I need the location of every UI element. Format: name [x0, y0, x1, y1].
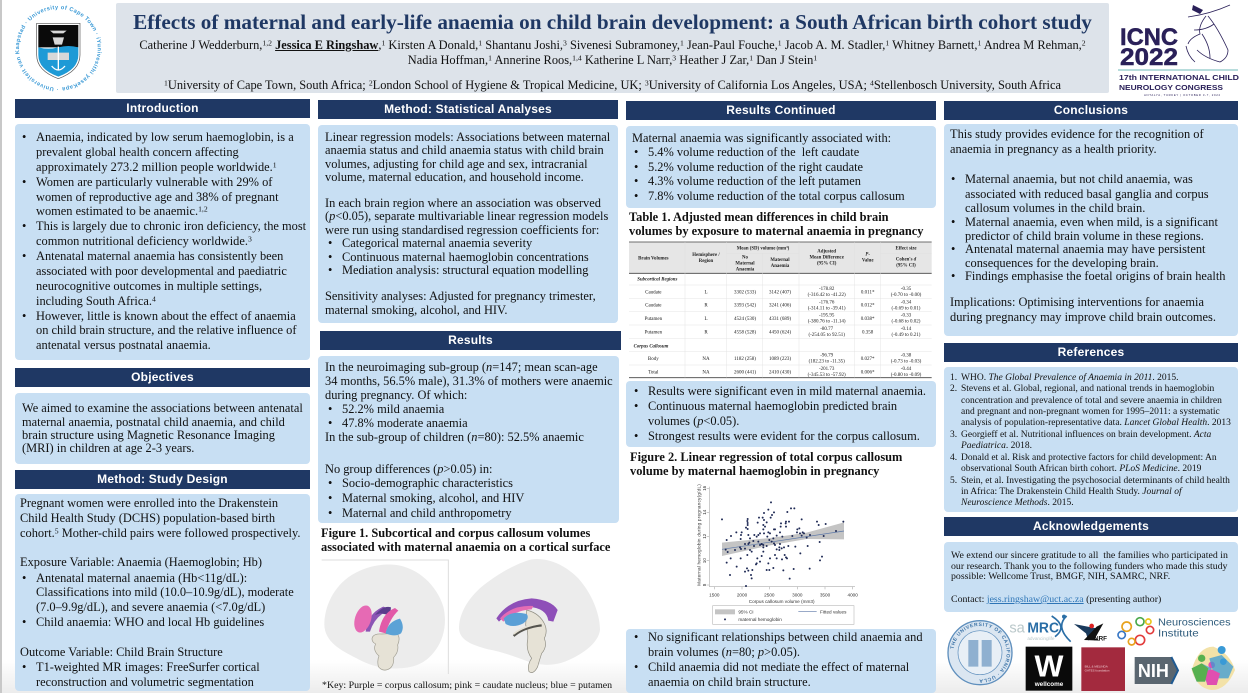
heading: Results — [320, 331, 621, 350]
panel: child anaemia bullets: brain volumes (n=80; p>0.05). — [648, 645, 800, 659]
logos: funders and institutions: GATES foundation — [1085, 669, 1110, 673]
panel: statistical analyses: volume, maternal education, and household income. — [325, 170, 584, 184]
heading: Conclusions — [944, 101, 1238, 120]
figure: brain renderings — [322, 559, 600, 674]
heading: Results: Results — [448, 333, 493, 347]
panel: references: 2. — [950, 384, 957, 394]
panel: study design: T1-weighted MR images: FreeSurfer cortical — [36, 660, 260, 674]
panel: results: • — [328, 491, 332, 505]
logos: funders and institutions: BILL & MELINDA — [1085, 664, 1108, 668]
panel: introduction: antenatal versus postnatal anaemia. — [36, 338, 211, 352]
panel: introduction: • — [22, 249, 26, 263]
panel: references: observational South African birth cohort. PLoS Medicine. 2019 — [961, 464, 1201, 474]
table: adjusted mean differences: -0.33 — [901, 314, 912, 319]
table: adjusted mean differences: -176.76 — [819, 300, 835, 305]
panel: child anaemia bullets: • — [634, 660, 638, 674]
panel: results: • — [328, 416, 332, 430]
panel: results: In the neuroimaging sub-group (n=147; mean scan-age — [325, 360, 598, 374]
panel: introduction: women of reproductive age and 38% of pregnant — [36, 190, 279, 204]
logos: funders and institutions: NRF — [1094, 636, 1107, 643]
panel: conclusions: Findings emphasise the foetal origins of brain health — [965, 269, 1226, 283]
panel: results: In the sub-group of children (n=80): 52.5% anaemic — [325, 430, 584, 444]
panel: statistical analyses: • — [328, 263, 332, 277]
panel: introduction: • — [22, 309, 26, 323]
panel: study design: Child Health Study (DCHS) population-based birth — [20, 511, 275, 525]
caption: Figure 2 — [630, 450, 902, 478]
table: adjusted mean differences: 0.011* — [861, 290, 875, 295]
panel: statistical analyses: were run using standardised regression coefficients for: — [325, 223, 599, 237]
table: adjusted mean differences: 1089 (223) — [769, 357, 791, 362]
logos: funders and institutions — [947, 614, 1235, 691]
logos: funders and institutions: wellcome — [1034, 681, 1064, 688]
panel: conclusions: Maternal anaemia, even when mild, is a significant — [965, 215, 1218, 229]
table: adjusted mean differences: 3302 (533) — [734, 290, 756, 295]
panel: conclusions: anaemia in pregnancy as a health priority. — [950, 142, 1157, 156]
panel: references: in Africa: The Drakenstein Child Health Study. Journal of — [961, 487, 1182, 497]
panel: objectives: (MRI) in children at age 2-3 years. — [22, 441, 194, 455]
chart: linear regression scatter: 2500 — [764, 593, 775, 598]
heading: Conclusions: Conclusions — [1054, 103, 1128, 117]
panel: conclusions: Antenatal maternal anaemia may have persistent — [965, 242, 1205, 256]
table: adjusted mean differences: -80.77 — [820, 327, 834, 332]
panel: results: No group differences (p>0.05) in: — [325, 462, 492, 476]
panel: statistical analyses — [318, 125, 618, 323]
panel: study design — [15, 494, 310, 691]
panel: objectives: We aimed to examine the associations between antenatal — [22, 401, 303, 415]
table: adjusted mean differences: (-314.11 to -39.41) — [808, 306, 846, 311]
table: adjusted mean differences: (-345.53 to -57.92) — [808, 373, 846, 378]
panel: results continued: • — [634, 145, 638, 159]
logo: University of Cape Town crest: · Universiteit van Kaapstad · University of Cape Town · iYunivesithi yaseKapa — [15, 6, 102, 92]
table: adjusted mean differences: 3393 (542) — [734, 304, 756, 309]
logo: ICNC 2022 — [1118, 4, 1240, 97]
logo: ICNC 2022: 17th INTERNATIONAL CHILD — [1119, 73, 1240, 82]
table: adjusted mean differences — [629, 242, 932, 378]
panel: results continued: 7.8% volume reduction of the total corpus callosum — [648, 189, 905, 203]
table: adjusted mean differences: 3142 (407) — [769, 290, 791, 295]
table: adjusted mean differences: (-0.68 to 0.02) — [892, 320, 921, 325]
panel: introduction: • — [22, 130, 26, 144]
table: adjusted mean differences: 4524 (530) — [734, 317, 756, 322]
panel: conclusions: • — [951, 242, 955, 256]
table: adjusted mean differences: 4331 (689) — [769, 317, 791, 322]
panel: study design: Child anaemia: WHO and local Hb guidelines — [36, 615, 264, 629]
panel: conclusions: • — [951, 215, 955, 229]
table: adjusted mean differences: -195.95 — [819, 314, 835, 319]
table: adjusted mean differences: R — [704, 330, 708, 335]
panel: references: Donald et al. Risk and protective factors for child development: An — [961, 453, 1217, 463]
table: adjusted mean differences: Region — [699, 259, 714, 264]
panel: statistical analyses: • — [328, 250, 332, 264]
panel: conclusions — [944, 124, 1238, 336]
panel: results continued: 5.4% volume reduction of the left caudate — [648, 145, 859, 159]
panel: statistical analyses: Continuous maternal haemoglobin concentrations — [342, 250, 589, 264]
chart: linear regression scatter: maternal hemoglobin — [738, 617, 782, 622]
panel: results: Maternal smoking, alcohol, and HIV — [342, 491, 524, 505]
panel: statistical analyses: (p<0.05), separate multivariable linear regression models — [325, 209, 608, 223]
chart: linear regression scatter: 12 — [702, 533, 707, 539]
heading: Objectives: Objectives — [131, 370, 194, 384]
panel: introduction: associated with poor developmental and paediatric — [36, 264, 287, 278]
panel: results — [318, 356, 619, 523]
chart: linear regression scatter: 2000 — [737, 593, 748, 598]
panel: results bullets: • — [634, 429, 638, 443]
panel: references — [944, 367, 1238, 512]
table: adjusted mean differences: R — [704, 304, 708, 309]
panel: conclusions: • — [951, 269, 955, 283]
panel: references: Georgieff et al. Nutritional influences on brain development. Acta — [961, 430, 1211, 440]
table: adjusted mean differences: NA — [702, 370, 710, 375]
panel: conclusions: Maternal anaemia, but not child anaemia, was — [965, 172, 1193, 186]
panel: statistical analyses: Linear regression models: Associations between maternal — [325, 130, 610, 144]
panel: references: concentration and prevalence of total and severe anaemia in children — [961, 396, 1222, 406]
heading: Method: Statistical Analyses: Method: Statistical Analyses — [384, 102, 552, 116]
panel: results: 52.2% mild anaemia — [342, 402, 444, 416]
table: adjusted mean differences: 0.358 — [862, 330, 874, 335]
table: adjusted mean differences: Total — [648, 370, 659, 375]
heading: Acknowledgements: Acknowledgements — [1033, 519, 1149, 533]
panel: acknowledgements: We extend our sincere gratitude to all the families who participated in — [951, 550, 1228, 561]
caption: Table 1: Table 1. Adjusted mean differences in child brain — [629, 210, 889, 224]
caption: Figure 1 — [321, 526, 610, 554]
table: adjusted mean differences: Hemisphere / — [692, 253, 720, 258]
panel: conclusions: associated with reduced basal ganglia and corpus — [965, 187, 1209, 201]
panel: study design: Antenatal maternal anaemia (Hb<11g/dL): — [36, 571, 247, 585]
panel: child anaemia bullets: No significant relationships between child anaemia and — [648, 630, 923, 644]
table: adjusted mean differences: Value — [862, 258, 874, 263]
panel: study design: reconstruction and volumetric segmentation — [36, 675, 254, 689]
panel: results bullets: • — [634, 384, 638, 398]
panel: results: Socio-demographic characteristics — [342, 476, 513, 490]
table: adjusted mean differences: 2410 (430) — [769, 370, 791, 375]
panel: results: during pregnancy. Of which: — [325, 388, 467, 402]
table: adjusted mean differences: -0.38 — [901, 354, 912, 359]
logo: ICNC 2022: 2022 — [1120, 44, 1178, 71]
logo: ICNC 2022: NEUROLOGY CONGRESS — [1119, 83, 1223, 92]
panel: statistical analyses: In each brain region where an association was observed — [325, 196, 601, 210]
table: adjusted mean differences: 2600 (441) — [734, 370, 756, 375]
panel: objectives — [15, 393, 310, 464]
panel: introduction: Antenatal maternal anaemia has consistently been — [36, 249, 283, 263]
heading: Introduction: Introduction — [126, 101, 199, 115]
panel: study design: • — [22, 615, 26, 629]
panel: results bullets: volumes (p<0.05). — [648, 414, 739, 428]
panel: results: • — [328, 506, 332, 520]
chart: linear regression scatter: 10 — [702, 558, 707, 563]
panel: results: 47.8% moderate anaemia — [342, 416, 468, 430]
table: adjusted mean differences: Mean (SD) volume (mm³) — [737, 245, 790, 251]
panel: statistical analyses: • — [328, 236, 332, 250]
panel: references: Stevens et al. Global, regional, and national trends in haemoglobin — [961, 384, 1214, 394]
table: adjusted mean differences: -201.73 — [819, 367, 835, 372]
panel: statistical analyses: Mediation analysis: structural equation modelling — [342, 263, 588, 277]
table: adjusted mean differences: -0.44 — [901, 367, 912, 372]
table: adjusted mean differences: (95% CI) — [896, 264, 916, 269]
panel: conclusions: consequences for the developing brain. — [965, 256, 1159, 270]
table: adjusted mean differences: (-0.49 to 0.21) — [892, 333, 921, 338]
heading: Method: Study Design: Method: Study Design — [97, 472, 228, 486]
logos: funders and institutions: Institute — [1158, 629, 1199, 640]
panel: results bullets: Continuous maternal haemoglobin predicted brain — [648, 399, 897, 413]
logos: funders and institutions: W — [1035, 650, 1064, 684]
table: adjusted mean differences: (-380.76 to -11.14) — [808, 320, 846, 325]
chart: linear regression scatter — [697, 484, 858, 625]
chart: linear regression scatter: 3500 — [820, 593, 831, 598]
table: adjusted mean differences: (-0.70 to -0.00) — [891, 293, 922, 298]
table: adjusted mean differences: -0.35 — [901, 287, 912, 292]
logos: funders and institutions: advancinglife — [1027, 636, 1055, 641]
table: adjusted mean differences: Putamen — [645, 330, 663, 335]
panel: conclusions: Implications: Optimising interventions for anaemia — [950, 295, 1204, 309]
table: adjusted mean differences: Subcortical Regions — [637, 278, 678, 283]
panel: statistical analyses: anaemia status and child anaemia status with child brain — [325, 143, 604, 157]
table: adjusted mean differences: Effect size — [895, 246, 917, 251]
panel: statistical analyses: Sensitivity analyses: Adjusted for pregnancy trimester, — [325, 289, 596, 303]
panel: results bullets: Strongest results were evident for the corpus callosum. — [648, 429, 920, 443]
table: adjusted mean differences: Body — [648, 357, 659, 362]
table: adjusted mean differences: -0.34 — [901, 300, 912, 305]
table: adjusted mean differences: L — [704, 290, 708, 295]
panel: conclusions: predictor of child brain volume in these regions. — [965, 229, 1204, 243]
table: adjusted mean differences: Mean Difference — [809, 256, 845, 261]
panel: introduction: • — [22, 175, 26, 189]
table: adjusted mean differences: Caudate — [645, 304, 662, 309]
panel: introduction: • — [22, 219, 26, 233]
table: adjusted mean differences: (95% CI) — [817, 262, 837, 267]
panel: child anaemia bullets — [626, 629, 936, 693]
panel: acknowledgements: our research. Thank you to the following funders who made this study — [951, 561, 1227, 572]
panel: introduction: women estimated to be anaemic.1,2 — [36, 204, 208, 218]
table: adjusted mean differences: -0.14 — [901, 327, 912, 332]
panel: results bullets: Results were significant even in mild maternal anaemia. — [648, 384, 926, 398]
table: adjusted mean differences: L — [704, 317, 708, 322]
panel: references: analysis of population-representative data. Lancet Global Health. 2013 — [961, 418, 1231, 428]
heading: Acknowledgements — [944, 517, 1238, 536]
table: adjusted mean differences: (-0.69 to 0.01) — [892, 306, 921, 311]
heading: Method: Statistical Analyses — [318, 100, 618, 119]
heading: References: References — [1058, 345, 1124, 359]
panel: study design: Exposure Variable: Anaemia (Haemoglobin; Hb) — [20, 555, 262, 569]
panel: references: 3. — [950, 430, 957, 440]
table: adjusted mean differences: 3241 (406) — [769, 304, 791, 309]
panel: results continued: • — [634, 189, 638, 203]
logos: funders and institutions: THE UNIVERSITY OF CALIFORNIA · UCLA — [950, 622, 1010, 683]
panel: results continued — [626, 126, 936, 208]
table: adjusted mean differences: 4558 (528) — [734, 330, 756, 335]
table: adjusted mean differences: 4450 (624) — [769, 330, 791, 335]
chart: linear regression scatter: 3000 — [792, 593, 803, 598]
panel: references: Stein, et al. Investigating the psychosocial determinants of child health — [961, 476, 1230, 486]
table: adjusted mean differences: Corpus Callosum — [634, 344, 669, 349]
panel: references: 4. — [950, 453, 957, 463]
heading: References — [944, 343, 1238, 362]
table: adjusted mean differences: (182.23 to -11.35) — [809, 360, 845, 365]
panel: statistical analyses: maternal smoking, alcohol, and HIV. — [325, 303, 508, 317]
table: adjusted mean differences: Caudate — [645, 290, 662, 295]
chart: linear regression scatter: 4000 — [847, 593, 858, 598]
panel: study design: Classifications into mild (10.0–10.9g/dL), moderate — [36, 585, 294, 599]
panel: child anaemia bullets: • — [634, 630, 638, 644]
table: adjusted mean differences: Maternal — [735, 261, 755, 266]
authors: Catherine J Wedderburn,1,2 Jessica E Ringshaw,1 Kirsten A Donald,1 Shantanu Joshi,3 Sivenesi Subramoney,1 Jean-Paul Fouche,1 Jacob A. M. Stadler,1 Whitney Barnett,1 Andrea M Rehman,2 — [139, 38, 1086, 52]
caption: Figure 1: associated with maternal anaemia on a cortical surface — [321, 540, 610, 554]
table: adjusted mean differences: -178.82 — [819, 287, 835, 292]
panel: results continued: Maternal anaemia was significantly associated with: — [632, 131, 891, 145]
header panel: title and authors — [116, 3, 1109, 93]
table: adjusted mean differences: (-316.42 to -41.22) — [808, 293, 846, 298]
logos: funders and institutions: MRC — [1027, 620, 1059, 636]
chart: linear regression scatter: 1500 — [709, 593, 720, 598]
table: adjusted mean differences: Anaemia — [771, 264, 790, 269]
panel: references: Paediatrica. 2018. — [961, 441, 1032, 451]
panel: conclusions: This study provides evidence for the recognition of — [950, 127, 1204, 141]
panel: results: • — [328, 402, 332, 416]
panel: introduction: This is largely due to chronic iron deficiency, the most — [36, 219, 306, 233]
caption: Table 1: volumes by exposure to maternal anaemia in pregnancy — [629, 224, 924, 238]
panel: introduction: Anaemia, indicated by low serum haemoglobin, is a — [36, 130, 294, 144]
table: adjusted mean differences: 0.027* — [861, 357, 875, 362]
authors: Nadia Hoffman,1 Annerine Roos,1,4 Katherine L Narr,3 Heather J Zar,1 Dan J Stein1 — [408, 53, 817, 67]
panel: study design: Pregnant women were enrolled into the Drakenstein — [20, 496, 278, 510]
panel: results: Maternal and child anthropometry — [342, 506, 512, 520]
caption: Figure 1: Figure 1. Subcortical and corpus callosum volumes — [321, 526, 590, 540]
panel: study design: Outcome Variable: Child Brain Structure — [20, 645, 223, 659]
table: adjusted mean differences: P- — [865, 252, 870, 257]
table: adjusted mean differences: (-0.80 to -0.09) — [891, 373, 922, 378]
logos: funders and institutions: sa — [1009, 620, 1026, 636]
panel: introduction: common nutritional deficiency worldwide.3 — [36, 234, 252, 248]
panel: results: • — [328, 476, 332, 490]
panel: results: 34 months, 56.5% male), 31.3% of mothers were anaemic — [325, 374, 613, 388]
chart: linear regression scatter: 95% CI — [738, 609, 754, 614]
heading: Introduction — [15, 99, 310, 118]
heading: Method: Study Design — [15, 470, 310, 489]
table: adjusted mean differences: 0.006* — [861, 370, 875, 375]
chart: linear regression scatter: Corpus callosum volume (mm3) — [749, 599, 815, 604]
panel: acknowledgements: Contact: jess.ringshaw@uct.ac.za (presenting author) — [951, 594, 1161, 605]
panel: child anaemia bullets: anaemia on child brain structure. — [648, 675, 811, 689]
panel: references: 5. — [950, 476, 957, 486]
table: adjusted mean differences: Putamen — [645, 317, 663, 322]
panel: results continued: 5.2% volume reduction of the right caudate — [648, 160, 863, 174]
panel: introduction: neurocognitive outcomes in multiple settings, — [36, 279, 262, 293]
caption: Figure 2: volume by maternal haemoglobin in pregnancy — [630, 464, 879, 478]
table: adjusted mean differences: 0.012* — [861, 304, 875, 309]
panel: acknowledgements — [944, 542, 1238, 612]
table: adjusted mean differences: 0.038* — [861, 317, 875, 322]
panel: objectives: brain structure using Magnetic Resonance Imaging — [22, 428, 275, 442]
panel: introduction: on child brain structure, and the relative influence of — [36, 323, 296, 337]
table: adjusted mean differences: No — [742, 255, 749, 260]
logo: ICNC 2022: ANTALYA, TURKEY | OCTOBER 3-7, 2022 — [1144, 93, 1220, 97]
panel: introduction: prevalent global health concern affecting — [36, 145, 239, 159]
panel: study design: (7.0–9.9g/dL), and severe anaemia (<7.0g/dL) — [36, 600, 265, 614]
table: adjusted mean differences: 1182 (258) — [734, 357, 756, 362]
panel: statistical analyses: Categorical maternal anaemia severity — [342, 236, 532, 250]
panel: references: Neuroscience Methods. 2015. — [961, 498, 1074, 508]
heading: Objectives — [15, 368, 310, 387]
caption: Table 1 — [629, 210, 924, 238]
chart: linear regression scatter: Maternal hemoglobin during pregnancy(g/dL) — [697, 484, 702, 586]
panel: study design: • — [22, 571, 26, 585]
panel: references: and pregnant and non-pregnant women for 1995–2011: a systematic — [961, 407, 1220, 417]
table: adjusted mean differences: Brain Volumes — [638, 257, 669, 262]
panel: results bullets: • — [634, 399, 638, 413]
panel: conclusions: callosum volumes in the child brain. — [965, 201, 1145, 215]
panel: acknowledgements: possible: Wellcome Trust, BMGF, NIH, SAMRC, NRF. — [951, 571, 1170, 582]
panel: child anaemia bullets: Child anaemia did not mediate the effect of maternal — [648, 660, 909, 674]
table: adjusted mean differences: -96.79 — [820, 354, 834, 359]
panel: introduction: approximately 273.2 million people worldwide.1 — [36, 160, 277, 174]
panel: conclusions: • — [951, 172, 955, 186]
title: Effects of maternal and early-life anaemia on child brain development: a South African birth cohort study — [133, 10, 1092, 34]
heading: Results Continued — [626, 101, 936, 120]
caption: Figure 2: Figure 2. Linear regression of total corpus callosum — [630, 450, 902, 464]
chart: linear regression scatter: 8 — [702, 583, 707, 586]
affiliations: 1University of Cape Town, South Africa; 2London School of Hygiene & Tropical Medicine, UK; 3University of California Los Angeles, USA; 4Stellenbosch University, South Africa — [164, 78, 1061, 92]
panel: statistical analyses: volumes, adjusting for child age and sex, intracranial — [325, 157, 588, 171]
figure key: *Key: Purple = corpus callosum; pink = caudate nucleus; blue = putamen — [322, 680, 612, 691]
panel: study design: cohort.5 Mother-child pairs were followed prospectively. — [20, 526, 300, 540]
chart: linear regression scatter: 16 — [702, 485, 707, 491]
panel: references: 1. — [950, 373, 957, 383]
panel: results continued: • — [634, 174, 638, 188]
logos: funders and institutions: Neurosciences — [1158, 618, 1231, 629]
table: adjusted mean differences: Cohen's d — [896, 258, 917, 263]
panel: results continued: • — [634, 160, 638, 174]
panel: introduction — [15, 124, 310, 360]
logos: funders and institutions: NIH — [1138, 661, 1169, 681]
panel: references: WHO. The Global Prevalence of Anaemia in 2011. 2015. — [961, 373, 1179, 383]
panel: introduction: including South Africa.4 — [36, 294, 156, 308]
authors — [139, 38, 1086, 67]
table: adjusted mean differences: Adjusted — [817, 250, 836, 255]
logo: ICNC 2022: ICNC — [1120, 24, 1178, 51]
chart: linear regression scatter: 14 — [702, 509, 707, 515]
panel: conclusions: during pregnancy may improve child brain outcomes. — [950, 310, 1216, 324]
panel: results continued: 4.3% volume reduction of the left putamen — [648, 174, 861, 188]
table: adjusted mean differences: Maternal — [770, 258, 790, 263]
chart: linear regression scatter: Fitted values — [820, 610, 847, 615]
panel: results bullets — [626, 381, 936, 447]
table: adjusted mean differences: (-0.73 to -0.03) — [891, 360, 922, 365]
panel: introduction: Women are particularly vulnerable with 29% of — [36, 175, 272, 189]
table: adjusted mean differences: NA — [702, 357, 710, 362]
panel: introduction: However, little is known about the effect of anaemia — [36, 309, 296, 323]
panel: objectives: maternal anaemia, postnatal child anaemia, and child — [22, 415, 285, 429]
heading: Results Continued: Results Continued — [726, 103, 836, 117]
table: adjusted mean differences: Anaemia — [736, 267, 755, 272]
panel: study design: • — [22, 660, 26, 674]
table: adjusted mean differences: (-254.05 to 92.51) — [808, 333, 845, 338]
